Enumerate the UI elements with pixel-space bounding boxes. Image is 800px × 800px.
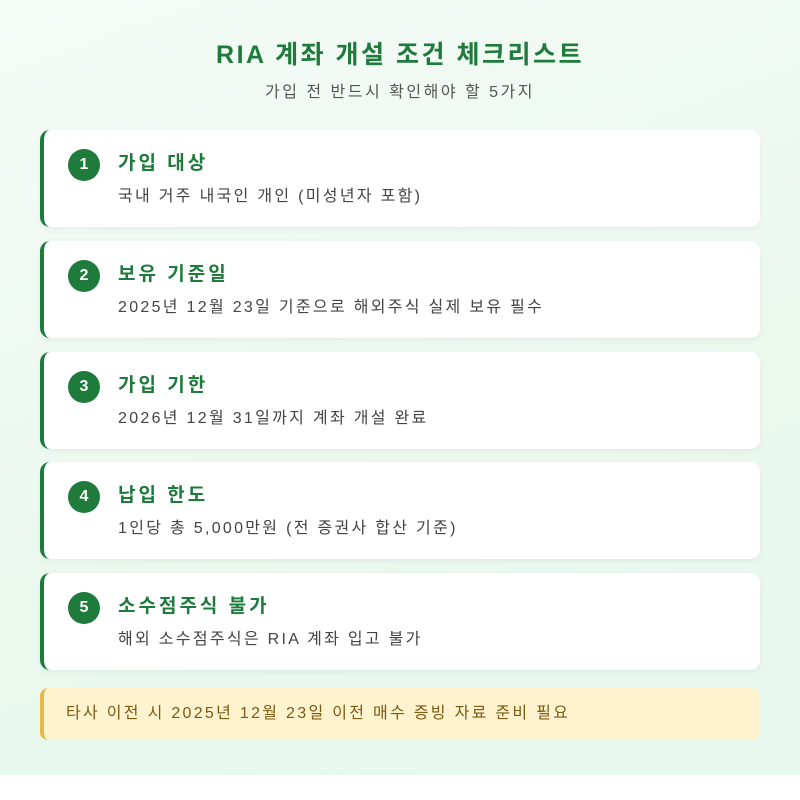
icon: number 2 (68, 260, 100, 292)
callout: note: 타사 이전 시 2025년 12월 23일 이전 매수 증빙 자료 준비 필요 (66, 705, 570, 722)
heading 4: 납입 한도 (118, 485, 208, 506)
icon: number 2: 2 (80, 267, 88, 284)
text 5: 해외 소수점주식은 RIA 계좌 입고 불가 (118, 631, 423, 648)
heading 3: 가입 기한 (118, 375, 208, 396)
panel: card 2 (40, 241, 760, 338)
title: RIA 계좌 개설 조건 체크리스트 (216, 41, 584, 69)
heading 1: 가입 대상 (118, 153, 208, 174)
callout: note (40, 688, 760, 740)
icon: number 1 (68, 149, 100, 181)
icon: number 1: 1 (80, 156, 88, 173)
panel: card 3 (40, 352, 760, 449)
icon: number 4 (68, 481, 100, 513)
heading 5: 소수점주식 불가 (118, 596, 270, 617)
subtitle: 가입 전 반드시 확인해야 할 5가지 (265, 84, 535, 101)
icon: number 3 (68, 371, 100, 403)
text 4: 1인당 총 5,000만원 (전 증권사 합산 기준) (118, 520, 458, 537)
panel: card 4 (40, 462, 760, 559)
panel: card 1 (40, 130, 760, 227)
text 3: 2026년 12월 31일까지 계좌 개설 완료 (118, 410, 429, 427)
icon: number 5 (68, 592, 100, 624)
icon: number 3: 3 (80, 378, 88, 395)
icon: number 5: 5 (80, 599, 88, 616)
icon: number 4: 4 (80, 488, 88, 505)
text 2: 2025년 12월 23일 기준으로 해외주식 실제 보유 필수 (118, 299, 544, 316)
text 1: 국내 거주 내국인 개인 (미성년자 포함) (118, 188, 422, 205)
heading 2: 보유 기준일 (118, 264, 229, 285)
panel: card 5 (40, 573, 760, 670)
